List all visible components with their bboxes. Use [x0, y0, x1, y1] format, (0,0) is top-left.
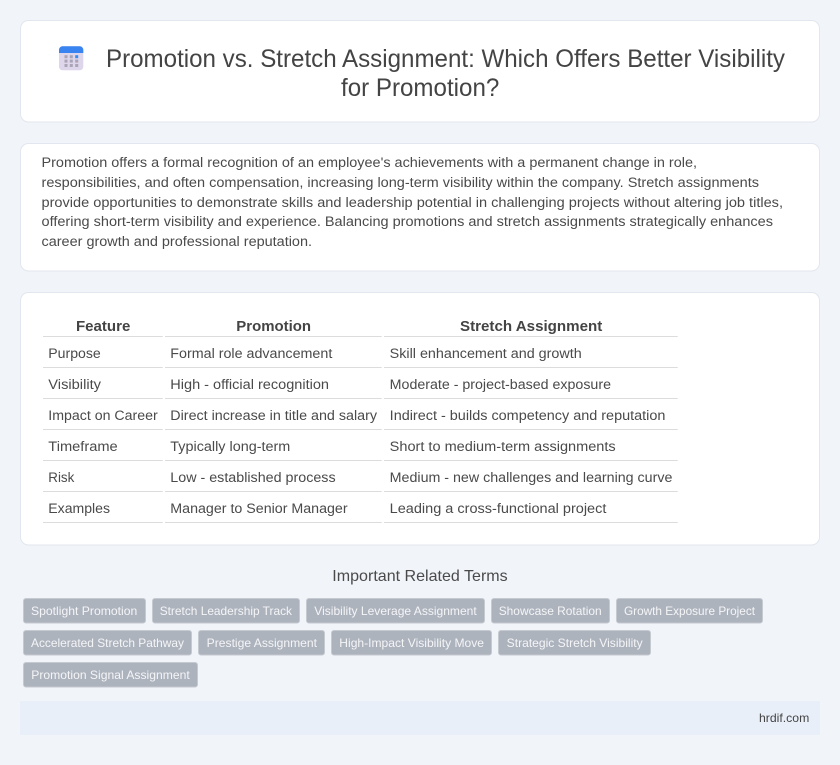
row: visibility: Visibility — [48, 377, 102, 393]
title — [106, 45, 785, 102]
title: for Promotion? — [341, 74, 499, 102]
row: risk: Risk — [48, 470, 75, 486]
tag: Promotion Signal Assignment — [31, 668, 190, 682]
tag — [24, 662, 198, 687]
tag: Spotlight Promotion — [31, 604, 137, 618]
row: timeframe: Timeframe — [48, 439, 118, 455]
tags: related terms — [24, 598, 762, 687]
row: timeframe: Typically long-term — [170, 439, 290, 455]
row: visibility: Moderate - project-based exposure — [390, 377, 611, 393]
table header: Feature — [76, 319, 130, 335]
tag: Strategic Stretch Visibility — [507, 636, 643, 650]
summary text: responsibilities, and often compensation, increasing long-term visibility within the company. Stretch assignments — [42, 175, 759, 191]
row: purpose: Skill enhancement and growth — [390, 346, 582, 362]
tag: Showcase Rotation — [499, 604, 602, 618]
tag — [152, 598, 300, 623]
table header: Stretch Assignment — [460, 319, 602, 335]
footer: hrdif.com — [759, 711, 809, 725]
tag — [616, 598, 762, 623]
table header — [76, 319, 602, 335]
tag: Accelerated Stretch Pathway — [31, 636, 184, 650]
tag: Growth Exposure Project — [624, 604, 756, 618]
row: examples — [48, 501, 606, 517]
row: timeframe: Short to medium-term assignments — [390, 439, 616, 455]
row: visibility — [48, 377, 611, 393]
tag: Prestige Assignment — [207, 636, 318, 650]
tag — [198, 630, 324, 655]
summary text — [42, 155, 783, 250]
table header: Promotion — [236, 319, 311, 335]
tag: High-Impact Visibility Move — [339, 636, 484, 650]
row: impact on career: Direct increase in title and salary — [170, 408, 378, 424]
panel: title header — [20, 20, 820, 122]
row: impact on career — [48, 408, 665, 424]
row: visibility: High - official recognition — [170, 377, 329, 393]
tag: Visibility Leverage Assignment — [314, 604, 477, 618]
panel: comparison table — [20, 292, 820, 545]
tag — [492, 598, 610, 623]
row: purpose — [48, 346, 582, 362]
tag — [24, 598, 146, 623]
row: risk: Low - established process — [170, 470, 336, 486]
tag — [306, 598, 484, 623]
summary text: career growth and professional reputation. — [42, 234, 312, 250]
row: examples: Examples — [48, 501, 110, 517]
row: examples: Manager to Senior Manager — [170, 501, 348, 517]
summary text: Promotion offers a formal recognition of an employee's achievements with a permanent change in role, — [42, 155, 697, 171]
title: Promotion vs. Stretch Assignment: Which Offers Better Visibility — [106, 45, 785, 73]
row: impact on career: Impact on Career — [48, 408, 158, 424]
footer — [20, 701, 820, 735]
icon: calendar — [59, 46, 83, 70]
panel: summary paragraph — [20, 144, 820, 271]
row: examples: Leading a cross-functional project — [390, 501, 606, 517]
summary text: provide opportunities to demonstrate skills and leadership potential in challenging projects without altering job titles, — [42, 195, 783, 211]
heading: important related terms: Important Related Terms — [332, 568, 508, 585]
row: impact on career: Indirect - builds competency and reputation — [390, 408, 665, 424]
row: risk: Medium - new challenges and learning curve — [390, 470, 673, 486]
row: risk — [48, 470, 673, 486]
tag — [498, 630, 650, 655]
tag — [24, 630, 192, 655]
tag — [332, 630, 492, 655]
row: purpose: Formal role advancement — [170, 346, 332, 362]
row: timeframe — [48, 439, 616, 455]
tag: Stretch Leadership Track — [160, 604, 293, 618]
summary text: offering short-term visibility and experience. Balancing promotions and stretch assignments strategically enhances — [42, 214, 773, 230]
row: purpose: Purpose — [48, 346, 101, 362]
